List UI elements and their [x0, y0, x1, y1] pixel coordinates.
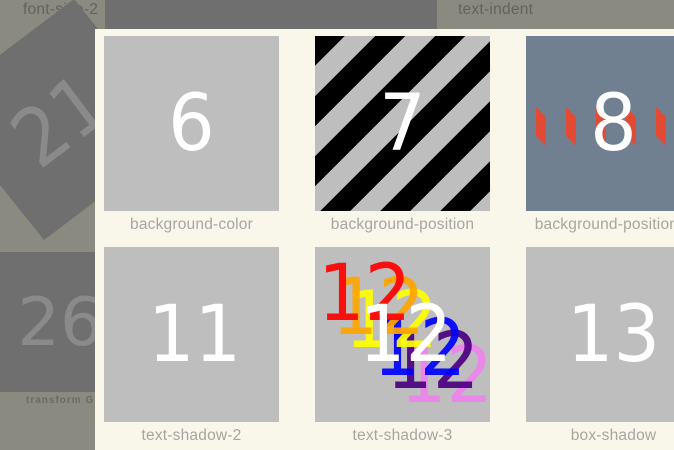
square 13 [526, 247, 674, 422]
tile 11: text-shadow-2 [104, 247, 279, 444]
square 6: 6 [168, 79, 215, 169]
label: background-position: background-position [331, 216, 474, 233]
tile 6: background-color [104, 36, 279, 233]
square 7: 7 [379, 79, 426, 169]
background tile: 26 [0, 252, 135, 392]
label: box-shadow: box-shadow [571, 427, 656, 444]
label: text-shadow-3: text-shadow-3 [353, 427, 452, 444]
square 8: 8 [590, 79, 637, 169]
background label: transform: transform G [26, 395, 94, 406]
square 7 [315, 36, 490, 211]
background tile: top dark strip [105, 0, 437, 29]
tile 7: background-position stripes [315, 36, 490, 233]
background label: font-size-2: font-size-2 [23, 1, 98, 18]
tile 8: background-position red shapes [526, 36, 674, 233]
square 11 [104, 247, 279, 422]
square 6 [104, 36, 279, 211]
background label: text-indent: text-indent [458, 1, 533, 18]
label: background-color: background-color [130, 216, 253, 233]
square 11: 11 [147, 290, 241, 380]
label: text-shadow-2: text-shadow-2 [142, 427, 241, 444]
background tile: rotated 21 [0, 0, 120, 240]
square 13: 13 [567, 290, 660, 380]
square 8 [526, 36, 674, 211]
background tile: 26: 26 [17, 283, 103, 361]
red parallelograms [536, 107, 666, 146]
tile 13: box-shadow [526, 247, 674, 444]
square 12 with rainbow shadows: 12 [358, 290, 452, 380]
tile 12: text-shadow-3 [315, 247, 490, 444]
square 12 with rainbow shadows [315, 247, 490, 422]
